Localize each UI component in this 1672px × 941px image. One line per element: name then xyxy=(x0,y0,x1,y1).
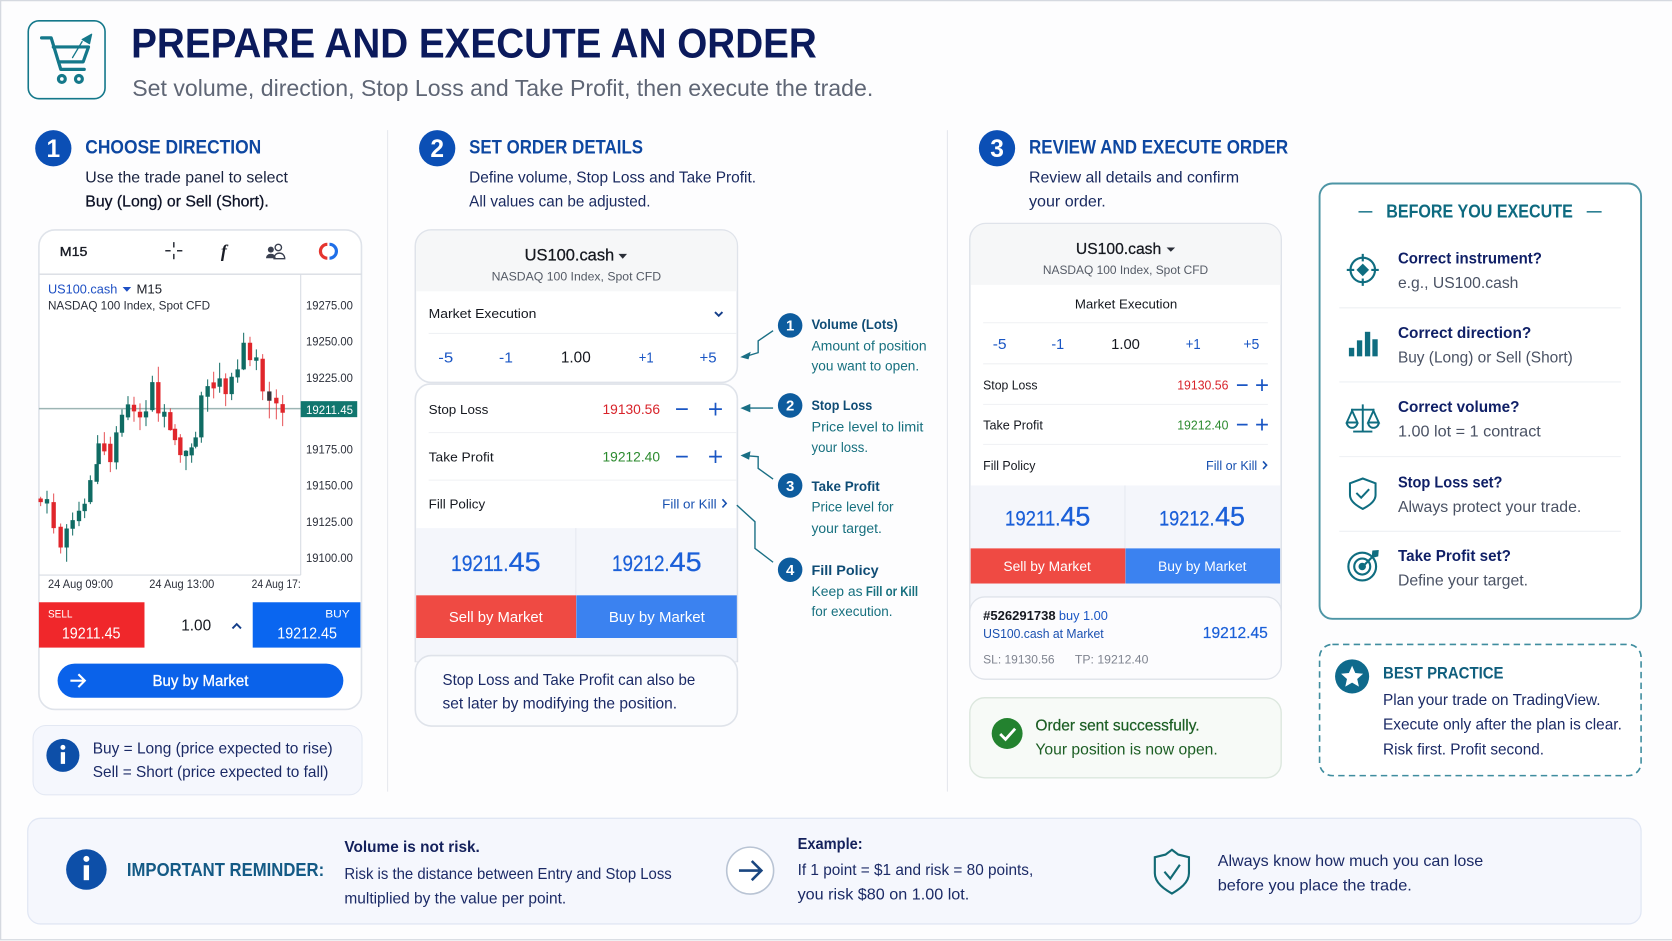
panel: best practice xyxy=(1320,644,1641,776)
buy tile xyxy=(253,602,360,648)
annotation 1: volume: you want to open. xyxy=(811,358,919,374)
sell by market: Sell by Market xyxy=(449,609,544,626)
order confirmation: 19212.45 xyxy=(1203,625,1268,642)
sell by market: Sell by Market xyxy=(1003,558,1091,574)
volume stepper: 1.00 xyxy=(1111,337,1140,353)
price axis: 19100.00 xyxy=(306,552,353,565)
annotation 1: volume: Volume (Lots) xyxy=(811,316,898,332)
stop loss row: Stop Loss xyxy=(983,377,1038,392)
step 2 heading: SET ORDER DETAILS xyxy=(469,138,643,159)
item: stop loss set: Stop Loss set? xyxy=(1398,475,1502,492)
buy by market button: Buy by Market xyxy=(152,673,249,690)
order card: levels and execution xyxy=(415,384,737,661)
candlestick chart xyxy=(39,274,357,591)
market execution row: Market Execution xyxy=(1075,296,1177,311)
instrument header: NASDAQ 100 Index, Spot CFD xyxy=(1043,264,1208,277)
closing text xyxy=(1218,853,1483,894)
icon: info xyxy=(46,739,79,772)
price axis: 19225.00 xyxy=(306,372,353,385)
market execution row xyxy=(429,306,722,321)
panel: step 3 review and execute order xyxy=(970,130,1288,778)
annotation 4: fill policy: 4 xyxy=(786,562,795,579)
stop loss row: 19130.56 xyxy=(602,401,660,417)
icon: target xyxy=(1348,550,1379,580)
volume: 1.00 xyxy=(181,618,211,635)
annotation 3: take profit: 3 xyxy=(786,478,794,495)
item: correct volume: Correct volume? xyxy=(1398,399,1520,416)
symbol label: NASDAQ 100 Index, Spot CFD xyxy=(48,298,210,312)
best practice heading: BEST PRACTICE xyxy=(1383,664,1504,683)
item: correct direction: Correct direction? xyxy=(1398,325,1531,342)
take profit row: Take Profit xyxy=(429,449,494,464)
icon: crosshair xyxy=(1347,254,1379,286)
step 2 description: Define volume, Stop Loss and Take Profit. xyxy=(469,169,756,186)
item: take profit set xyxy=(1348,548,1528,590)
price axis: 19275.00 xyxy=(306,299,353,312)
example text xyxy=(798,836,1033,903)
volume stepper: 1.00 xyxy=(561,350,591,367)
note: modify later: set later by modifying the position. xyxy=(443,695,677,712)
success message: Order sent successfully. xyxy=(1035,717,1200,734)
instrument header xyxy=(416,230,737,291)
step 2 number xyxy=(419,130,455,166)
fill policy row: Fill or Kill xyxy=(1206,458,1257,473)
success message: Your position is now open. xyxy=(1035,741,1218,758)
reminder text: Risk is the distance between Entry and Stop Loss xyxy=(344,866,672,883)
success message xyxy=(970,698,1281,778)
market execution row: Market Execution xyxy=(429,306,536,321)
annotation 1: volume: 1 xyxy=(786,318,794,335)
step 3 heading: REVIEW AND EXECUTE ORDER xyxy=(1029,138,1288,159)
annotation 1: volume xyxy=(778,313,927,374)
best practice text: Plan your trade on TradingView. xyxy=(1383,692,1601,709)
fill policy row xyxy=(983,458,1267,473)
checklist heading: BEFORE YOU EXECUTE xyxy=(1386,202,1573,222)
step 1 description xyxy=(85,169,288,210)
price axis: 19125.00 xyxy=(306,516,353,529)
annotation 4: fill policy xyxy=(778,557,918,619)
arrow xyxy=(727,847,774,894)
icon: scales xyxy=(1347,404,1379,432)
title: PREPARE AND EXECUTE AN ORDER xyxy=(131,20,817,67)
example text: If 1 point = $1 and risk = 80 points, xyxy=(798,862,1033,879)
annotation 4: fill policy: Fill Policy xyxy=(811,562,879,578)
time axis: 24 Aug 17: xyxy=(252,578,301,591)
buy tile: 19212.45 xyxy=(277,626,337,643)
arrow: stop loss xyxy=(742,405,773,411)
annotation 3: take profit: your target. xyxy=(811,520,882,536)
order confirmation: TP: 19212.40 xyxy=(1075,653,1149,667)
annotation 2: stop loss: Price level to limit xyxy=(811,419,924,435)
toolbar: M15 xyxy=(60,244,87,259)
time axis: 24 Aug 13:00 xyxy=(149,578,215,591)
fill policy row: Fill Policy xyxy=(983,458,1036,473)
volume stepper: +5 xyxy=(700,350,717,367)
order card: instrument and volume xyxy=(415,230,737,382)
icon: shield check xyxy=(1155,850,1189,894)
volume stepper xyxy=(438,350,717,367)
annotation 3: take profit xyxy=(778,473,894,536)
step 3 description: your order. xyxy=(1029,193,1106,210)
header xyxy=(28,20,873,101)
stop loss row: 19130.56 xyxy=(1177,377,1228,392)
icon: bars xyxy=(1349,332,1378,356)
take profit row xyxy=(429,448,722,464)
connector: fill policy xyxy=(737,505,773,562)
best practice text xyxy=(1383,692,1622,758)
annotation 2: stop loss xyxy=(778,393,924,455)
toolbar: f xyxy=(221,241,229,261)
price block xyxy=(416,528,737,661)
buy by market xyxy=(1126,548,1280,584)
volume xyxy=(181,618,241,635)
symbol label: M15 xyxy=(136,281,162,296)
price block: 19211. xyxy=(451,551,509,576)
instrument header: NASDAQ 100 Index, Spot CFD xyxy=(492,270,661,284)
symbol label: US100.cash xyxy=(48,281,117,296)
volume stepper: +5 xyxy=(1243,337,1259,353)
volume stepper: +1 xyxy=(1186,337,1201,353)
sell by market xyxy=(416,595,576,638)
step 1 heading: CHOOSE DIRECTION xyxy=(85,138,261,159)
subtitle: Set volume, direction, Stop Loss and Take Profit, then execute the trade. xyxy=(132,75,873,101)
annotation 3: take profit: Take Profit xyxy=(811,478,880,494)
callout text: Sell = Short (price expected to fall) xyxy=(93,764,328,781)
note: modify later: Stop Loss and Take Profit can also be xyxy=(443,672,695,689)
instrument header: US100.cash xyxy=(525,245,614,264)
best practice text: Risk first. Profit second. xyxy=(1383,741,1544,758)
annotation 4: fill policy: Fill or Kill xyxy=(866,583,918,599)
item: correct volume xyxy=(1347,399,1542,440)
note: modify later xyxy=(415,656,737,726)
reminder text: Volume is not risk. xyxy=(344,839,480,856)
order review card xyxy=(970,224,1281,679)
take profit row: 19212.40 xyxy=(1177,417,1228,432)
stop loss row: Stop Loss xyxy=(429,402,489,417)
reminder label: IMPORTANT REMINDER: xyxy=(127,859,324,880)
volume stepper: -1 xyxy=(1051,337,1064,353)
toolbar xyxy=(39,241,361,274)
take profit row: 19212.40 xyxy=(602,448,660,464)
annotation 4: fill policy: for execution. xyxy=(811,603,893,619)
arrow: volume xyxy=(742,331,773,358)
panel: before you execute checklist xyxy=(1320,184,1641,619)
icon: info xyxy=(66,849,107,890)
step 1 description: Buy (Long) or Sell (Short). xyxy=(85,193,269,210)
price block: 19212. xyxy=(612,551,670,576)
example text: Example: xyxy=(798,836,863,853)
annotation 2: stop loss: 2 xyxy=(786,398,794,415)
callout text: Buy = Long (price expected to rise) xyxy=(93,741,333,758)
item: correct instrument: e.g., US100.cash xyxy=(1398,275,1518,292)
step 1 number xyxy=(35,130,71,166)
sell by market xyxy=(971,548,1125,584)
volume stepper: +1 xyxy=(639,350,654,367)
step 3 description xyxy=(1029,169,1239,210)
buy by market: Buy by Market xyxy=(609,609,706,626)
instrument header: US100.cash xyxy=(1076,241,1161,258)
step 2 number: 2 xyxy=(430,136,444,163)
panel: step 1 choose direction xyxy=(33,130,362,795)
fill policy row xyxy=(429,496,726,511)
item: take profit set: Take Profit set? xyxy=(1398,548,1511,565)
item: correct volume: 1.00 lot = 1 contract xyxy=(1398,423,1542,440)
best practice text: Execute only after the plan is clear. xyxy=(1383,717,1622,734)
icon: shield xyxy=(1350,479,1376,509)
volume stepper xyxy=(993,337,1259,353)
stop loss row xyxy=(983,377,1268,392)
info callout: buy and sell xyxy=(33,725,362,795)
order confirmation: #526291738 xyxy=(983,608,1056,623)
step 3 description: Review all details and confirm xyxy=(1029,169,1239,186)
sell tile: 19211.45 xyxy=(62,626,121,643)
stop loss row xyxy=(429,401,722,417)
item: correct instrument: Correct instrument? xyxy=(1398,251,1542,268)
phone: chart trade panel xyxy=(39,230,361,709)
order confirmation: US100.cash at Market xyxy=(983,626,1104,641)
time axis xyxy=(48,578,301,591)
item: take profit set: Define your target. xyxy=(1398,573,1528,590)
time axis: 24 Aug 09:00 xyxy=(48,578,113,591)
item: correct instrument xyxy=(1347,251,1542,292)
order confirmation: SL: 19130.56 xyxy=(983,653,1055,667)
example text: you risk $80 on 1.00 lot. xyxy=(798,886,969,903)
arrow: take profit xyxy=(742,452,773,479)
closing text: before you place the trade. xyxy=(1218,877,1412,894)
order confirmation xyxy=(970,584,1281,679)
buy by market xyxy=(576,595,737,638)
instrument header xyxy=(971,224,1281,285)
price block: 45 xyxy=(670,546,702,577)
annotation 2: stop loss: Stop Loss xyxy=(811,397,873,413)
panel: important reminder xyxy=(28,818,1641,924)
price axis xyxy=(301,299,357,565)
step 3 number xyxy=(979,130,1015,166)
take profit row xyxy=(983,417,1268,432)
price axis: 19175.00 xyxy=(306,443,353,456)
icon: shopping cart xyxy=(28,21,105,99)
item: stop loss set: Always protect your trade. xyxy=(1398,499,1581,516)
icon: check xyxy=(992,718,1023,749)
price axis: 19250.00 xyxy=(306,336,353,349)
step 2 description: All values can be adjusted. xyxy=(469,193,650,210)
step 2 description xyxy=(469,169,756,210)
step 1 description: Use the trade panel to select xyxy=(85,169,288,186)
step 1 number: 1 xyxy=(46,136,60,163)
item: correct direction xyxy=(1349,325,1573,367)
price block: 19211. xyxy=(1005,506,1060,530)
item: stop loss set xyxy=(1350,475,1581,516)
panel: step 2 set order details xyxy=(415,130,927,726)
sell tile xyxy=(39,602,144,648)
buy by market button xyxy=(58,664,343,698)
buy by market: Buy by Market xyxy=(1158,558,1247,574)
candles xyxy=(41,333,283,562)
price axis: 19211.45 xyxy=(306,404,353,417)
volume stepper: -5 xyxy=(438,350,453,367)
fill policy row: Fill or Kill xyxy=(662,496,717,511)
order confirmation: buy 1.00 xyxy=(1059,608,1108,623)
price block: 45 xyxy=(1060,501,1090,531)
volume stepper: -1 xyxy=(499,350,513,367)
reminder text: multiplied by the value per point. xyxy=(344,891,566,908)
buy tile: BUY xyxy=(325,609,350,621)
callout text xyxy=(93,741,333,781)
item: correct direction: Buy (Long) or Sell (Short) xyxy=(1398,350,1573,367)
price axis: 19150.00 xyxy=(306,480,353,493)
sell tile: SELL xyxy=(48,609,73,621)
price block: 45 xyxy=(509,546,541,577)
price block: 19212. xyxy=(1159,506,1215,530)
annotation 2: stop loss: your loss. xyxy=(811,439,868,455)
price block: 45 xyxy=(1215,501,1245,531)
step 3 number: 3 xyxy=(990,136,1004,163)
fill policy row: Fill Policy xyxy=(429,496,486,511)
annotation 3: take profit: Price level for xyxy=(811,499,894,515)
price block xyxy=(971,485,1280,548)
take profit row: Take Profit xyxy=(983,417,1043,432)
volume stepper: -5 xyxy=(993,337,1007,353)
symbol label xyxy=(48,281,210,312)
annotation 1: volume: Amount of position xyxy=(811,337,927,353)
closing text: Always know how much you can lose xyxy=(1218,853,1483,870)
icon: star xyxy=(1335,659,1369,693)
reminder text xyxy=(344,839,672,908)
annotation 4: fill policy: Keep as xyxy=(811,583,863,599)
